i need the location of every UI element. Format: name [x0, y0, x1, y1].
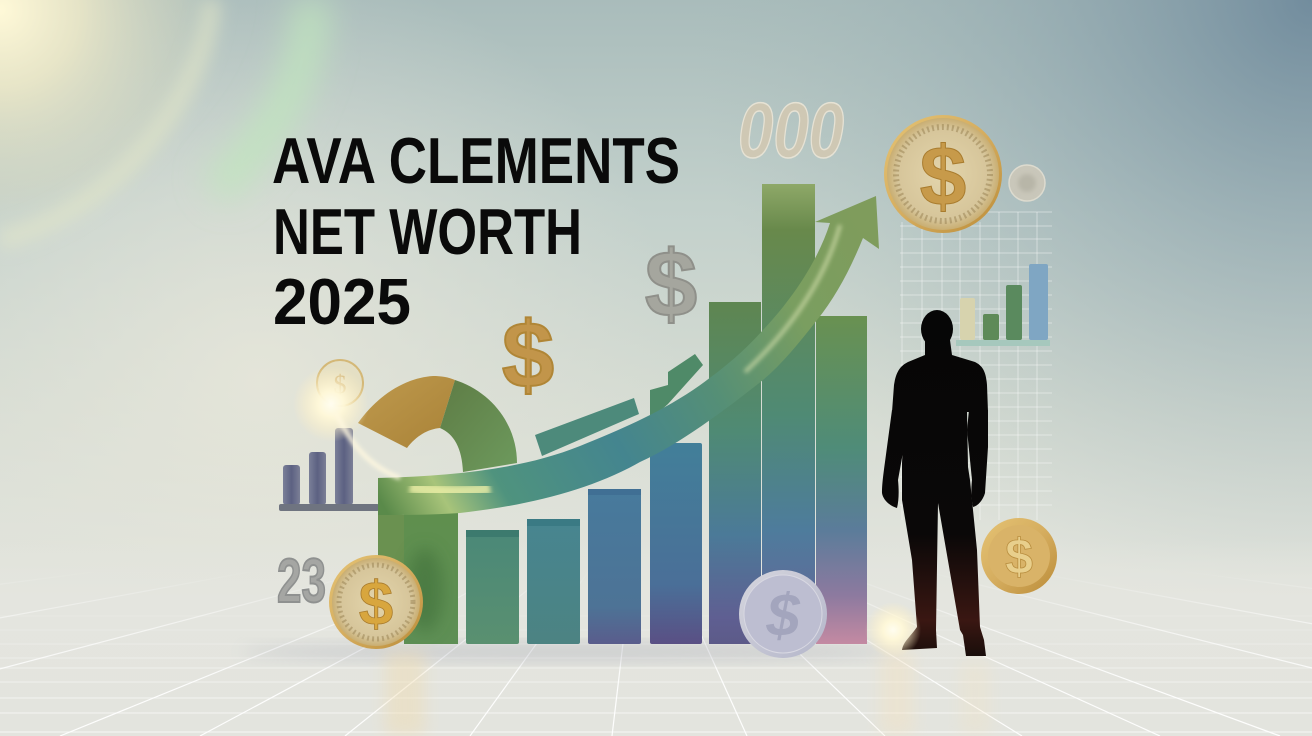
- gold dollar sign: $: [502, 302, 554, 407]
- silver coin bottom: $: [765, 582, 800, 649]
- right arm: [967, 410, 988, 507]
- gauge arc: [358, 376, 517, 472]
- bar 5: [650, 443, 702, 644]
- gold coin lower left: $: [359, 570, 393, 639]
- head: [921, 310, 953, 348]
- silver dollar sign: $: [645, 231, 697, 336]
- title: AVA CLEMENTS: [272, 124, 680, 197]
- torso and legs: [892, 340, 988, 656]
- small chart left: [279, 428, 379, 511]
- left arm: [882, 410, 907, 508]
- silver coin bottom: [739, 570, 827, 658]
- floor reflections and shadow: [240, 644, 990, 736]
- bar 4: [588, 489, 641, 644]
- title: NET WORTH: [273, 195, 582, 268]
- secondary ribbons: [535, 354, 703, 456]
- gold coin lower left: [329, 555, 423, 649]
- shelf chart right: [956, 264, 1050, 346]
- big gold coin: [884, 115, 1002, 233]
- small faded coin: [317, 360, 363, 406]
- person silhouette: [882, 310, 988, 656]
- small faded coin: $: [334, 370, 346, 399]
- bar 6: [709, 302, 761, 644]
- bar 1: [378, 505, 458, 644]
- title: 2025: [273, 265, 411, 338]
- bar 7: [762, 184, 815, 644]
- gold coin lower right: $: [1005, 529, 1033, 585]
- light flares: [293, 366, 921, 658]
- growth arrow: [378, 196, 879, 515]
- bar 2: [466, 530, 519, 644]
- bar 8: [816, 316, 867, 644]
- floor tiles: [0, 500, 1312, 736]
- title: [272, 124, 680, 338]
- floating zeros: 000: [738, 86, 844, 174]
- bar chart: [378, 184, 867, 644]
- gold coin lower right: [981, 518, 1057, 594]
- small silver coin: [1009, 165, 1045, 201]
- right grid panel: [900, 212, 1052, 520]
- bar 3: [527, 519, 580, 644]
- big gold coin: $: [920, 129, 966, 223]
- number 23: 23: [277, 547, 326, 616]
